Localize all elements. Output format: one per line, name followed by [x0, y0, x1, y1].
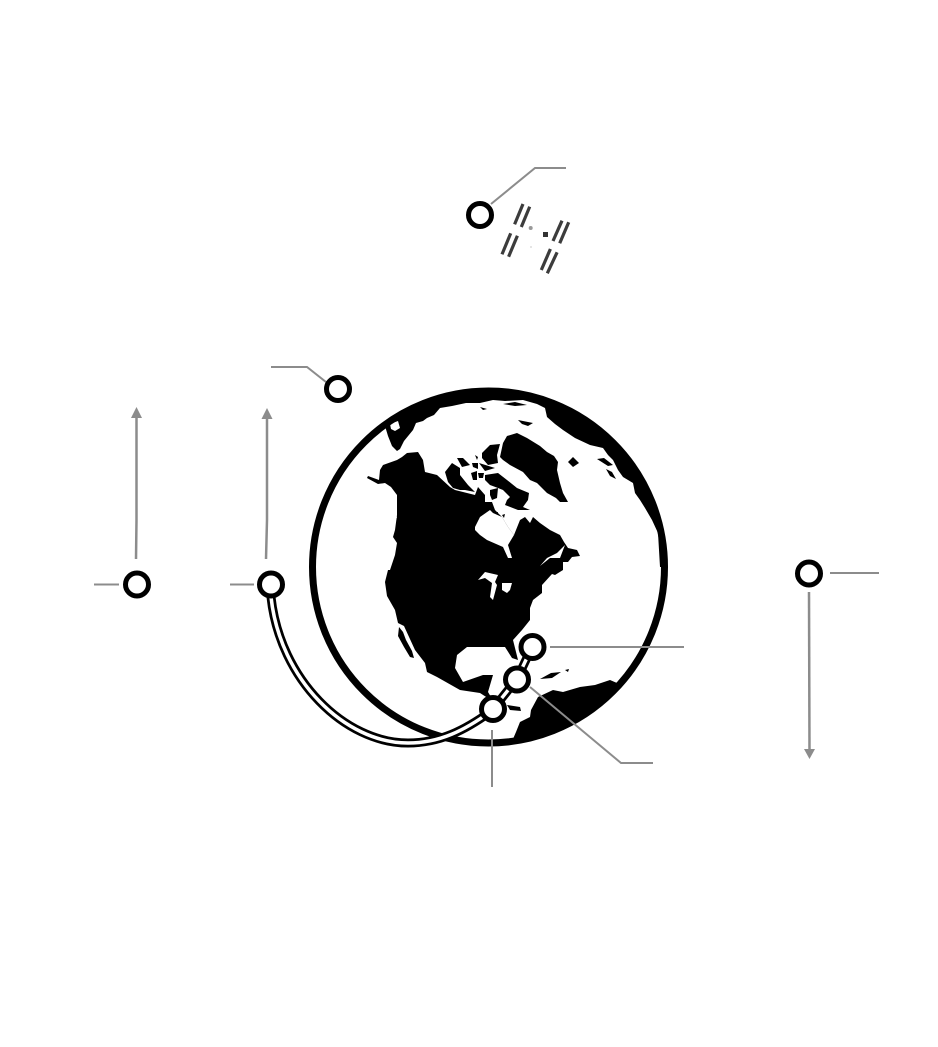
- ellesmere island: [482, 444, 500, 465]
- waypoint markers: [126, 204, 820, 720]
- globe: [309, 388, 668, 746]
- gulf of st lawrence: [540, 545, 565, 566]
- cuba and caribbean: [540, 669, 569, 679]
- great lakes west: [478, 572, 498, 600]
- arctic islands: [445, 402, 616, 518]
- lakes and bays: [393, 510, 565, 600]
- globe outline: [312, 391, 664, 743]
- north america: [367, 452, 580, 702]
- coastal slit: [393, 516, 397, 530]
- banks island: [457, 458, 470, 467]
- arctic and eurasia landmass: [386, 394, 661, 567]
- baffin island: [485, 473, 530, 510]
- space station: [502, 204, 569, 273]
- hudson bay: [475, 510, 514, 558]
- arrow: right down: [804, 592, 815, 759]
- great lakes east: [502, 583, 512, 593]
- victoria island: [445, 463, 475, 492]
- central america link: [507, 705, 521, 711]
- ascent links between waypoints: [493, 647, 532, 709]
- arrow: middle up: [262, 408, 272, 559]
- white patch in siberia: [390, 421, 400, 431]
- leader lines: [94, 168, 879, 787]
- arrow: left up: [131, 407, 142, 559]
- small northern islands: [518, 420, 533, 426]
- greenland: [500, 433, 568, 502]
- infographic canvas: [94, 167, 879, 787]
- south america: [514, 680, 616, 738]
- orbit path: [271, 597, 490, 743]
- southampton island: [490, 488, 498, 500]
- baja peninsula: [398, 627, 414, 658]
